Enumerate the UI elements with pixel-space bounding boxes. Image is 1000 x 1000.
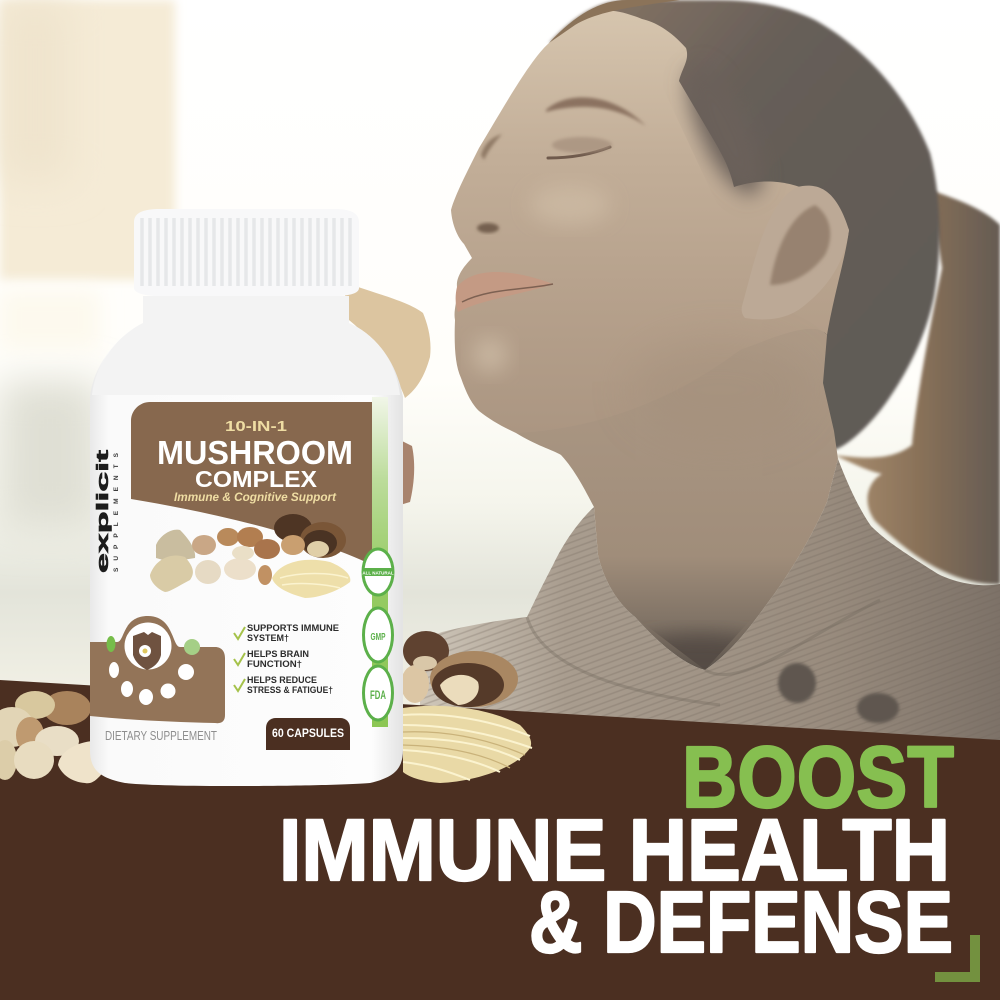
benefits list: SYSTEM† xyxy=(247,633,289,644)
dietary supplement: DIETARY SUPPLEMENT xyxy=(105,729,217,743)
eye xyxy=(548,147,610,158)
product title: 10-IN-1 xyxy=(225,418,287,435)
badge: all natural xyxy=(362,549,394,595)
bottle cap xyxy=(134,209,359,296)
badge panel xyxy=(90,616,225,723)
mushrooms right of bottle xyxy=(401,631,532,783)
benefits list: HELPS BRAIN xyxy=(247,649,309,660)
cheek highlight xyxy=(530,185,610,225)
bottle body xyxy=(90,296,403,786)
jaw shadow xyxy=(630,340,810,440)
badge: GMP xyxy=(364,608,392,662)
bottle xyxy=(90,209,403,786)
badge: FDA xyxy=(364,666,392,720)
shoulder shade xyxy=(92,296,400,395)
sweater buttons xyxy=(778,663,816,703)
headline xyxy=(279,729,954,971)
brand logo: SUPPLEMENTS xyxy=(113,452,120,572)
benefits list: HELPS REDUCE xyxy=(247,675,317,686)
collar shadow xyxy=(656,626,740,670)
sweater xyxy=(420,459,1000,760)
benefits list xyxy=(234,623,339,696)
mushroom cluster xyxy=(150,514,350,598)
badge: all natural: ALL NATURAL xyxy=(362,570,394,576)
green stripe xyxy=(372,397,388,727)
brand logo xyxy=(93,449,120,573)
ear xyxy=(742,186,849,319)
headline: BOOST xyxy=(682,729,954,826)
lips xyxy=(456,272,553,312)
hair strand over forehead xyxy=(549,0,680,43)
benefits list: FUNCTION† xyxy=(247,659,302,670)
headline: IMMUNE HEALTH xyxy=(279,802,950,899)
hair over temple shadow xyxy=(674,56,776,204)
benefits list: STRESS & FATIGUE† xyxy=(247,685,333,696)
neck and face xyxy=(451,11,849,685)
label brown panel: Immune & Cognitive Support xyxy=(174,490,337,504)
woman portrait xyxy=(420,0,1000,760)
brown banner xyxy=(0,680,1000,1000)
label brown panel: COMPLEX xyxy=(195,466,318,492)
benefits list: SUPPORTS IMMUNE xyxy=(247,623,339,634)
brand logo: explicit xyxy=(93,449,112,573)
badge: FDA: FDA xyxy=(370,688,386,702)
label brown panel xyxy=(131,402,372,565)
label brown panel: MUSHROOM xyxy=(157,434,353,471)
photo background xyxy=(0,0,1000,760)
capsule count: 60 CAPSULES xyxy=(272,728,344,740)
icon: shield xyxy=(133,632,161,670)
enoki bundle xyxy=(403,706,532,783)
face xyxy=(451,11,849,433)
eyebrow xyxy=(546,97,646,126)
mushrooms left of bottle xyxy=(0,691,112,783)
capsule count xyxy=(266,718,350,750)
hair xyxy=(549,0,940,450)
hand and cup behind bottle xyxy=(345,285,431,505)
ponytail xyxy=(834,190,1000,584)
corner bracket xyxy=(935,935,980,982)
neck xyxy=(516,290,838,670)
badge: GMP: GMP xyxy=(370,632,386,643)
nostril xyxy=(477,223,499,233)
